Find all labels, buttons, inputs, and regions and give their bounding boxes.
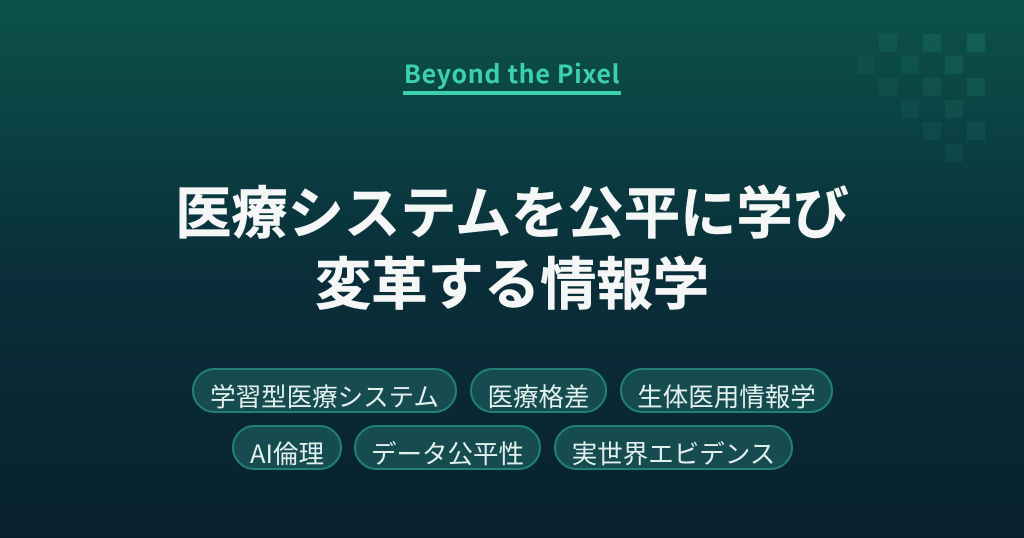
tag: data fairness: データ公平性 <box>371 434 524 471</box>
title: 変革する情報学 <box>315 240 709 321</box>
tag: AI ethics <box>232 425 342 470</box>
tag: AI ethics: AI倫理 <box>250 434 324 471</box>
tag: real world evidence <box>554 425 793 470</box>
tag: data fairness <box>354 425 541 470</box>
tag: biomedical informatics: 生体医用情報学 <box>637 377 816 414</box>
tag: real world evidence: 実世界エビデンス <box>572 434 775 471</box>
decorative pixel grid <box>879 34 985 162</box>
title: 医療システムを公平に学び <box>175 169 849 250</box>
keyword tags <box>192 368 833 471</box>
brand label: Beyond the Pixel: Beyond the Pixel <box>404 55 620 91</box>
tag: biomedical informatics <box>620 368 833 413</box>
tag: health disparities: 医療格差 <box>487 377 590 414</box>
tag: health disparities <box>470 368 607 413</box>
tag: learning health system <box>192 368 457 413</box>
title <box>175 169 849 321</box>
tag: learning health system: 学習型医療システム <box>210 377 439 414</box>
